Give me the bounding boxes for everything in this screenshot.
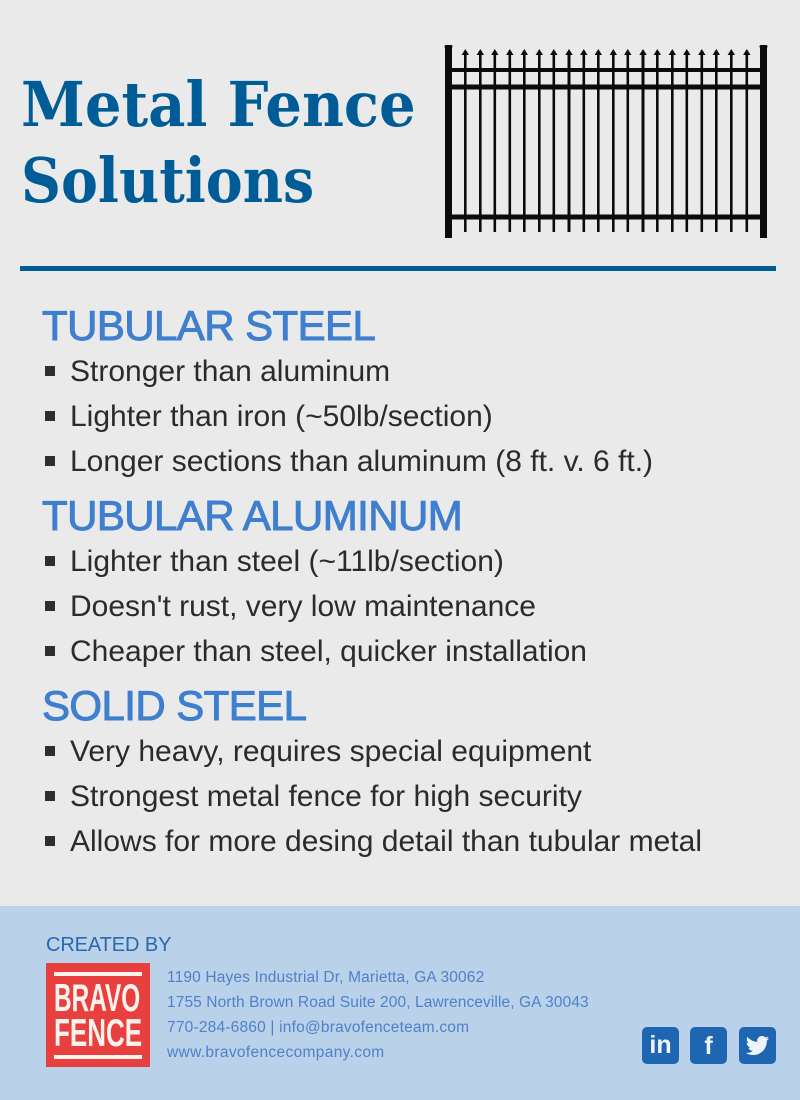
icon: linkedin [642,1027,679,1064]
panel: tubular steel [42,302,653,478]
bullet [45,411,55,421]
icon: facebook [690,1027,727,1064]
icon: linkedin: in [649,1031,672,1059]
divider [20,266,776,271]
text: lighter: Lighter than iron (~50lb/section) [70,400,493,433]
icon: metal fence [444,45,768,238]
icon: facebook: f [704,1032,713,1060]
text: stronger: Stronger than aluminum [70,355,390,388]
title [21,68,416,217]
logo: bravo fence: FENCE [54,1012,142,1055]
bullet [45,836,55,846]
panel: tubular aluminum [42,492,587,668]
title: Metal Fence [21,68,416,141]
bullet [45,646,55,656]
text: longer: Longer sections than aluminum (8 ft. v. 6 ft.) [70,445,653,478]
logo: bravo fence [46,963,150,1067]
text: heavy: Very heavy, requires special equipment [70,735,591,768]
logo: bravo fence: BRAVO [54,977,140,1020]
heading: solid steel: SOLID STEEL [42,682,306,729]
text: cheaper: Cheaper than steel, quicker installation [70,635,587,668]
text: contact: 770-284-6860 | info@bravofenceteam.com [167,1019,469,1036]
text: website: www.bravofencecompany.com [167,1044,385,1061]
heading: tubular aluminum: TUBULAR ALUMINUM [42,492,462,539]
text: address 1: 1190 Hayes Industrial Dr, Marietta, GA 30062 [167,969,484,986]
panel: footer [0,906,800,1100]
panel: solid steel [42,682,702,858]
text: lighter: Lighter than steel (~11lb/section) [70,545,504,578]
icon: twitter [739,1027,776,1064]
bullet [45,601,55,611]
text: strongest: Strongest metal fence for high security [70,780,582,813]
bullet [45,366,55,376]
heading: tubular steel: TUBULAR STEEL [42,302,375,349]
text: created by: CREATED BY [46,934,171,956]
bullet [45,746,55,756]
bullet [45,791,55,801]
text: detail: Allows for more desing detail than tubular metal [70,825,702,858]
title: Solutions [21,144,314,217]
text: rust: Doesn't rust, very low maintenance [70,590,536,623]
text: address 2: 1755 North Brown Road Suite 200, Lawrenceville, GA 30043 [167,994,589,1011]
bullet [45,556,55,566]
bullet [45,456,55,466]
